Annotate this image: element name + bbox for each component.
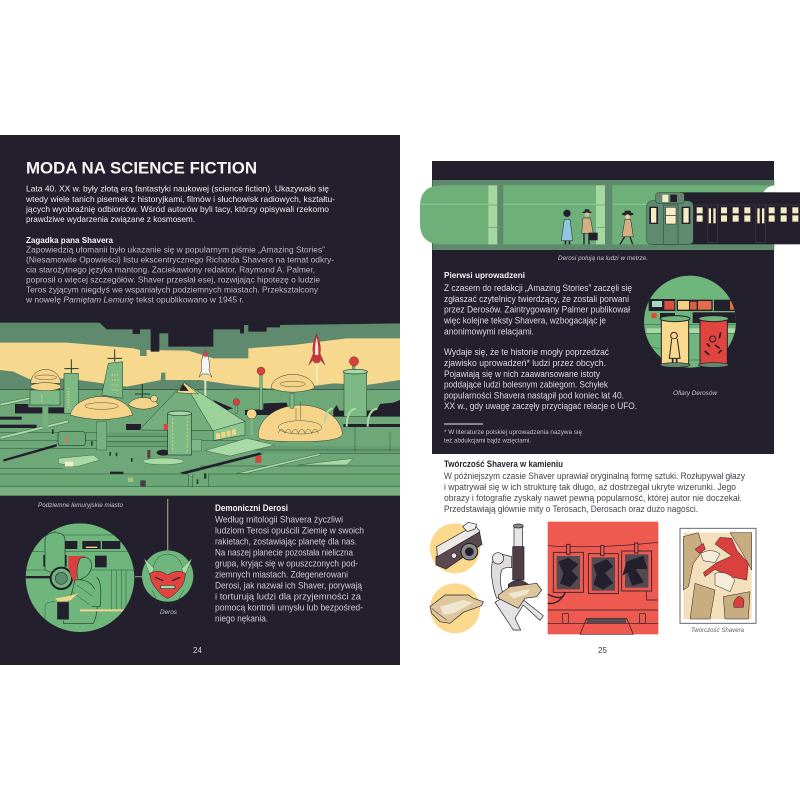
ramps: [0, 395, 353, 473]
text block: Demoniczni Derosi: Derosi, jak nazwał ich Shaver, porywają: [215, 580, 362, 590]
caption: city: Podziemne lemuryjskie miasto: [38, 503, 124, 509]
caption: Twórczość Shavera: Twórczość Shavera: [691, 628, 745, 634]
caption: subway: Derosi polują na ludzi w metrze.: [558, 256, 648, 262]
text block: introduction: [25, 184, 335, 224]
rocket: red: [309, 334, 325, 383]
text block: Zagadka pana Shavera: Zapowiedzią ufomanii było ukazanie się w popularnym piśmie „Amazing Stories”: [26, 244, 325, 254]
text block: Pierwsi uprowadzeni: Pojawiają się w nich zaawansowane istoty: [444, 369, 601, 379]
text block: Pierwsi uprowadzeni: przez Derosów. Zaintrygowany Palmer publikował: [444, 305, 630, 315]
text block: Zagadka pana Shavera: [25, 244, 334, 304]
text block: Demoniczni Derosi: niego nękania.: [215, 614, 268, 624]
text block: introduction: jących wyobraźnię odbiorców. Wśród autorów byli tacy, którzy opisywali rzekomo: [25, 204, 329, 214]
illustration: Deros face: [142, 550, 193, 602]
illustration: underground scene circle: [23, 523, 140, 632]
rocket: white: [199, 350, 212, 396]
text block: Zagadka pana Shavera: Teros żyjącym niegdyś we wspaniałych podziemnych miastach. Przekształcony: [26, 284, 319, 294]
text block: Demoniczni Derosi: Według mitologii Shavera życzliwi: [215, 514, 343, 524]
heading: Pierwsi uprowadzeni: Pierwsi uprowadzeni: [444, 270, 525, 280]
pipes: [325, 409, 377, 427]
tube: woman: [660, 316, 690, 367]
illustration: subway: [420, 180, 800, 250]
text block: Pierwsi uprowadzeni: popularności Shavera nastąpił pod koniec lat 40.: [444, 390, 624, 400]
text block: introduction: prawdziwe wydarzenia związane z kosmosem.: [26, 214, 195, 224]
text block: introduction: wtedy wiele tanich pisemek z historyjkami, filmów i słuchowisk radiowych, kształtu-: [25, 194, 335, 204]
text block: Pierwsi uprowadzeni: Z czasem do redakcji „Amazing Stories” zaczęli się: [444, 283, 632, 293]
text block: Zagadka pana Shavera: (Niesamowite Opowieści) listu ekscentrycznego Richarda Shavera na temat odkry-: [26, 254, 334, 264]
title: MODA NA SCIENCE FICTION: [26, 158, 257, 178]
red ball poles: [235, 366, 355, 413]
figure: woman in blue: [561, 210, 573, 244]
text block: Zagadka pana Shavera: poprosił o więcej szczegółów. Shaver przesłał esej, rozwijając hipotezę o ludzie: [26, 274, 320, 284]
framed artwork: [680, 528, 756, 623]
caption: victims: Ofiary Derosów: [673, 391, 718, 397]
text block: Pierwsi uprowadzeni: XX w., gdy uwagę zaczęły przyciągać relacje o UFO.: [444, 401, 637, 411]
icon: camera: [430, 522, 482, 573]
cylinder tower: [168, 413, 192, 455]
text block: Twórczość Shavera: obrazy i fotografie zyskały nawet pewną popularność, której autor nie doczekał.: [444, 493, 742, 503]
text block: Demoniczni Derosi: pomocą kontroli umysłu lub bezpośred-: [215, 602, 363, 612]
footnote: * W literaturze polskiej uprowadzenia nazywa się: [444, 430, 583, 436]
text block: Twórczość Shavera: [444, 471, 746, 514]
text block: Demoniczni Derosi: grupa, kryjąc się w opuszczonych pod-: [215, 558, 358, 568]
heading: Zagadka pana Shavera: Zagadka pana Shavera: [26, 235, 113, 245]
figure: woman in hat: [620, 211, 634, 244]
tube: torn victim: [699, 316, 729, 367]
panel: right page dark box: [420, 161, 800, 454]
icon: rock: [430, 583, 483, 633]
text block: Pierwsi uprowadzeni: [443, 283, 637, 411]
text block: Demoniczni Derosi: ziemnych miastach. Zdegenerowani: [215, 570, 348, 580]
text block: Demoniczni Derosi: rakietach, zostawiając planetę dla nas.: [215, 536, 357, 546]
train: [647, 192, 800, 244]
road bands: [103, 433, 400, 453]
illustration: victims of Deros circle: [643, 276, 740, 368]
text block: Pierwsi uprowadzeni: Wydaje się, że te historie mogły poprzedzać: [444, 347, 610, 357]
domes: [30, 369, 342, 442]
caption: Deros: Deros: [160, 610, 177, 616]
page number 24: 24: [193, 646, 203, 655]
connector lines: [135, 499, 168, 577]
text block: Demoniczni Derosi: [215, 514, 364, 624]
footnote: też abdukcjami bądź wzięciami.: [444, 438, 531, 444]
red panel: photos: [548, 522, 658, 634]
pyramid: [139, 383, 245, 441]
text block: Twórczość Shavera: i wpatrywał się w ich strukturę tak długo, aż dostrzegał ukryte wizerunki. Jego: [444, 482, 736, 492]
panel: left page: [0, 135, 400, 665]
heading: Twórczość Shavera w kamieniu: Twórczość Shavera w kamieniu: [444, 459, 563, 469]
text block: Demoniczni Derosi: i torturują ludzi dla przyjemności za: [215, 592, 361, 602]
small figures: [52, 429, 206, 484]
dark skyline: [0, 400, 400, 474]
text block: Twórczość Shavera: Przedstawiają głównie mity o Terosach, Derosach oraz dużo nagości.: [444, 504, 698, 514]
text block: Zagadka pana Shavera: w nowelę Pamiętam Lemurię tekst opublikowano w 1945 r.: [25, 294, 244, 304]
text block: Pierwsi uprowadzeni: poddające ludzi bolesnym zabiegom. Schyłek: [444, 380, 609, 390]
page number 25: 25: [598, 646, 608, 655]
tower stems: [97, 422, 107, 450]
text block: Pierwsi uprowadzeni: zgłaszać czytelnicy twierdzący, że zostali porwani: [444, 294, 629, 304]
text block: Pierwsi uprowadzeni: zjawisko uprowadzeń* ludzi przez obcych.: [444, 358, 606, 368]
illustration: underground Lemurian city: [0, 320, 400, 496]
text block: Demoniczni Derosi: Na naszej planecie pozostała nieliczna: [215, 548, 353, 558]
heading: Demoniczni Derosi: Demoniczni Derosi: [215, 503, 288, 513]
text block: introduction: Lata 40. XX w. były złotą erą fantastyki naukowej (science fiction). Ukazywało się: [26, 184, 329, 194]
infographic spread: [0, 135, 800, 665]
illustrations: stone art: [430, 522, 756, 634]
towers: [30, 362, 367, 417]
text block: Pierwsi uprowadzeni: anonimowymi relacjami.: [444, 326, 534, 336]
text block: Pierwsi uprowadzeni: więc kolejne teksty Shavera, wzbogacając je: [443, 316, 606, 326]
icon: microscope: [491, 524, 543, 630]
figure: man with briefcase: [582, 209, 598, 244]
text block: Demoniczni Derosi: ludziom Terosi opuścili Ziemię w swoich: [215, 526, 364, 536]
footnote: [444, 424, 583, 444]
text block: Zagadka pana Shavera: cia starożytnego języka mantong. Zaciekawiony redaktor, Raymond A. Palmer,: [26, 264, 315, 274]
text block: Twórczość Shavera: W późniejszym czasie Shaver uprawiał oryginalną formę sztuki. Rozłupywał głazy: [444, 471, 746, 481]
